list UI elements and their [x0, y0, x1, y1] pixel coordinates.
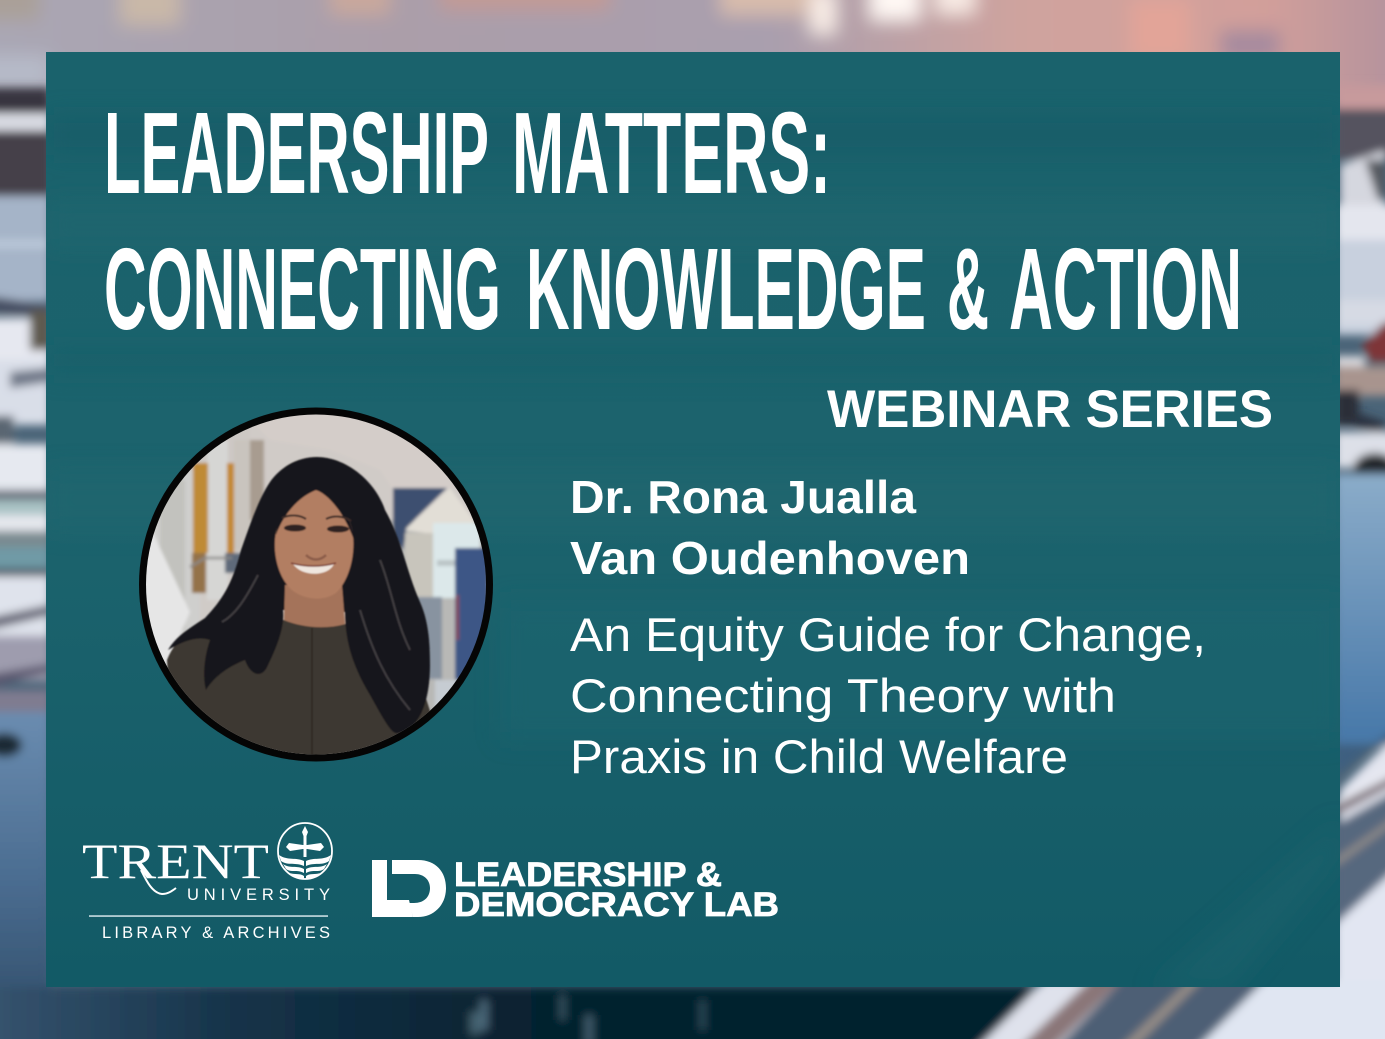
talk title: [570, 608, 1206, 783]
logo: Leadership & Democracy Lab: [372, 856, 779, 924]
nose: [306, 555, 326, 560]
icon: LD mark: [372, 860, 446, 917]
speaker name: [570, 471, 970, 584]
hair back: [168, 457, 430, 733]
title: KNOWLEDGE: [526, 224, 926, 354]
right strip: [1335, 85, 1385, 109]
face: [275, 490, 353, 599]
subtitle: webinar series: WEBINAR SERIES: [827, 380, 1273, 439]
left wall and columns: [140, 470, 200, 670]
title: [104, 88, 1242, 354]
bottom strip: [0, 987, 1385, 1039]
logo: Trent University Library & Archives: LIBRARY & ARCHIVES: [102, 924, 330, 942]
logo: Leadership & Democracy Lab: LEADERSHIP &: [454, 856, 722, 894]
torso: [167, 620, 433, 765]
talk title: Praxis in Child Welfare: [570, 730, 1068, 783]
icon: Trent crest: [278, 823, 332, 879]
talk title: Connecting Theory with: [570, 669, 1116, 722]
logo: Trent University Library & Archives: UNIVERSITY: [187, 886, 330, 904]
logo: Trent University Library & Archives: TRENT: [82, 833, 269, 889]
sky: [0, 0, 1385, 105]
title: LEADERSHIP: [104, 88, 489, 218]
hair highlights: [222, 560, 410, 710]
left water: [0, 712, 50, 1039]
title: &: [947, 224, 989, 354]
smile: [293, 564, 334, 574]
speaker photo: [139, 408, 493, 765]
title: CONNECTING: [104, 224, 501, 354]
logo: Trent University Library & Archives: [82, 823, 332, 942]
title: MATTERS:: [512, 88, 831, 218]
speaker name: Van Oudenhoven: [570, 532, 970, 584]
speaker name: Dr. Rona Jualla: [570, 471, 916, 523]
ceiling: [240, 410, 490, 490]
left strip: [0, 88, 50, 113]
right architecture: [390, 520, 482, 711]
eyes: [284, 524, 306, 532]
talk title: An Equity Guide for Change,: [570, 608, 1206, 661]
logo: Leadership & Democracy Lab: DEMOCRACY LAB: [454, 886, 779, 924]
neck: [284, 585, 345, 627]
